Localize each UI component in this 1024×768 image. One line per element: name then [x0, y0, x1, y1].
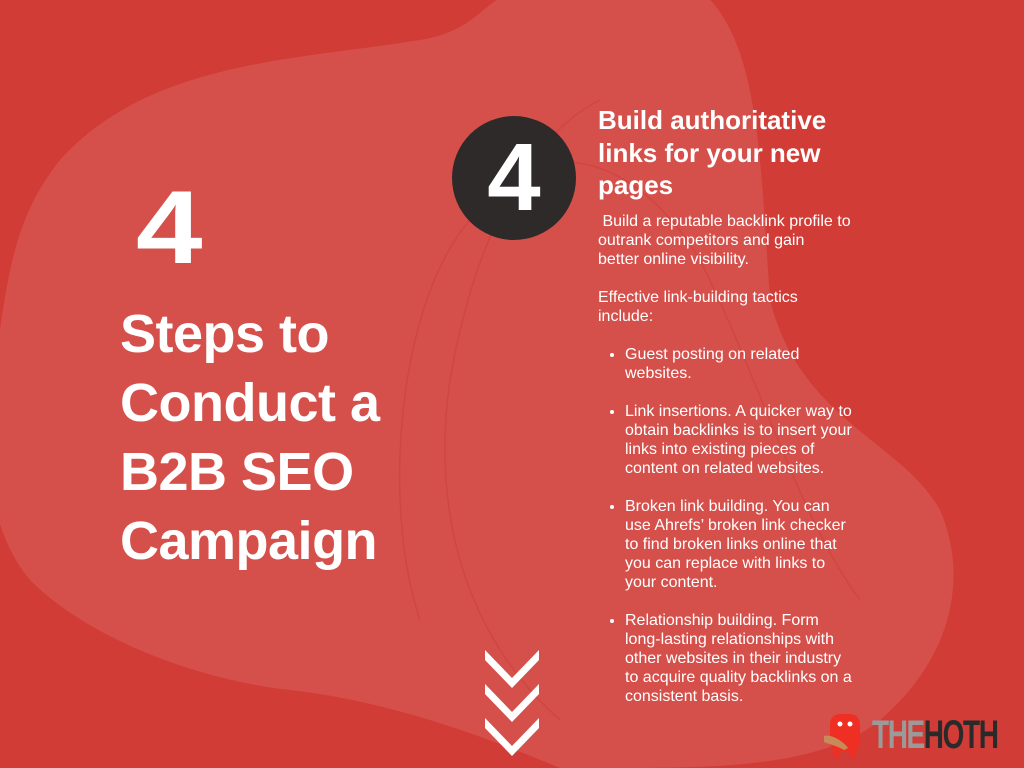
step body text: Effective link-building tactics: [598, 289, 798, 306]
step body text: Relationship building. Form: [625, 612, 819, 629]
step body text: content on related websites.: [625, 460, 824, 477]
step body text: websites.: [625, 365, 692, 382]
step body text: consistent basis.: [625, 688, 743, 705]
step body text: to find broken links online that: [625, 536, 837, 553]
step body text: Guest posting on related: [625, 346, 799, 363]
step body text: long-lasting relationships with: [625, 631, 834, 648]
step number circle: [452, 116, 576, 240]
logo: The Hoth: THEHOTH: [872, 713, 998, 757]
step body text: links into existing pieces of: [625, 441, 814, 458]
title: B2B SEO: [120, 442, 354, 502]
step body text: [598, 213, 852, 705]
step body text: other websites in their industry: [625, 650, 841, 667]
step body text: to acquire quality backlinks on a: [625, 669, 852, 686]
step heading: pages: [598, 170, 673, 200]
title: Conduct a: [120, 373, 380, 433]
step heading: [598, 105, 826, 200]
step body text: better online visibility.: [598, 251, 749, 268]
step body text: outrank competitors and gain: [598, 232, 804, 249]
step body text: use Ahrefs’ broken link checker: [625, 517, 846, 534]
step body text: Broken link building. You can: [625, 498, 830, 515]
title: [120, 304, 380, 571]
arrows: chevrons down: [485, 650, 539, 756]
step number circle: 4: [487, 124, 541, 231]
big number 4: 4: [136, 170, 203, 286]
step body text: include:: [598, 308, 653, 325]
step body text: you can replace with links to: [625, 555, 825, 572]
step heading: Build authoritative: [598, 105, 826, 135]
step heading: links for your new: [598, 138, 820, 168]
title: Steps to: [120, 304, 329, 364]
step body text: Link insertions. A quicker way to: [625, 403, 852, 420]
title: Campaign: [120, 511, 377, 571]
step body text: obtain backlinks is to insert your: [625, 422, 852, 439]
step body text: your content.: [625, 574, 718, 591]
step body text: Build a reputable backlink profile to: [602, 213, 851, 230]
